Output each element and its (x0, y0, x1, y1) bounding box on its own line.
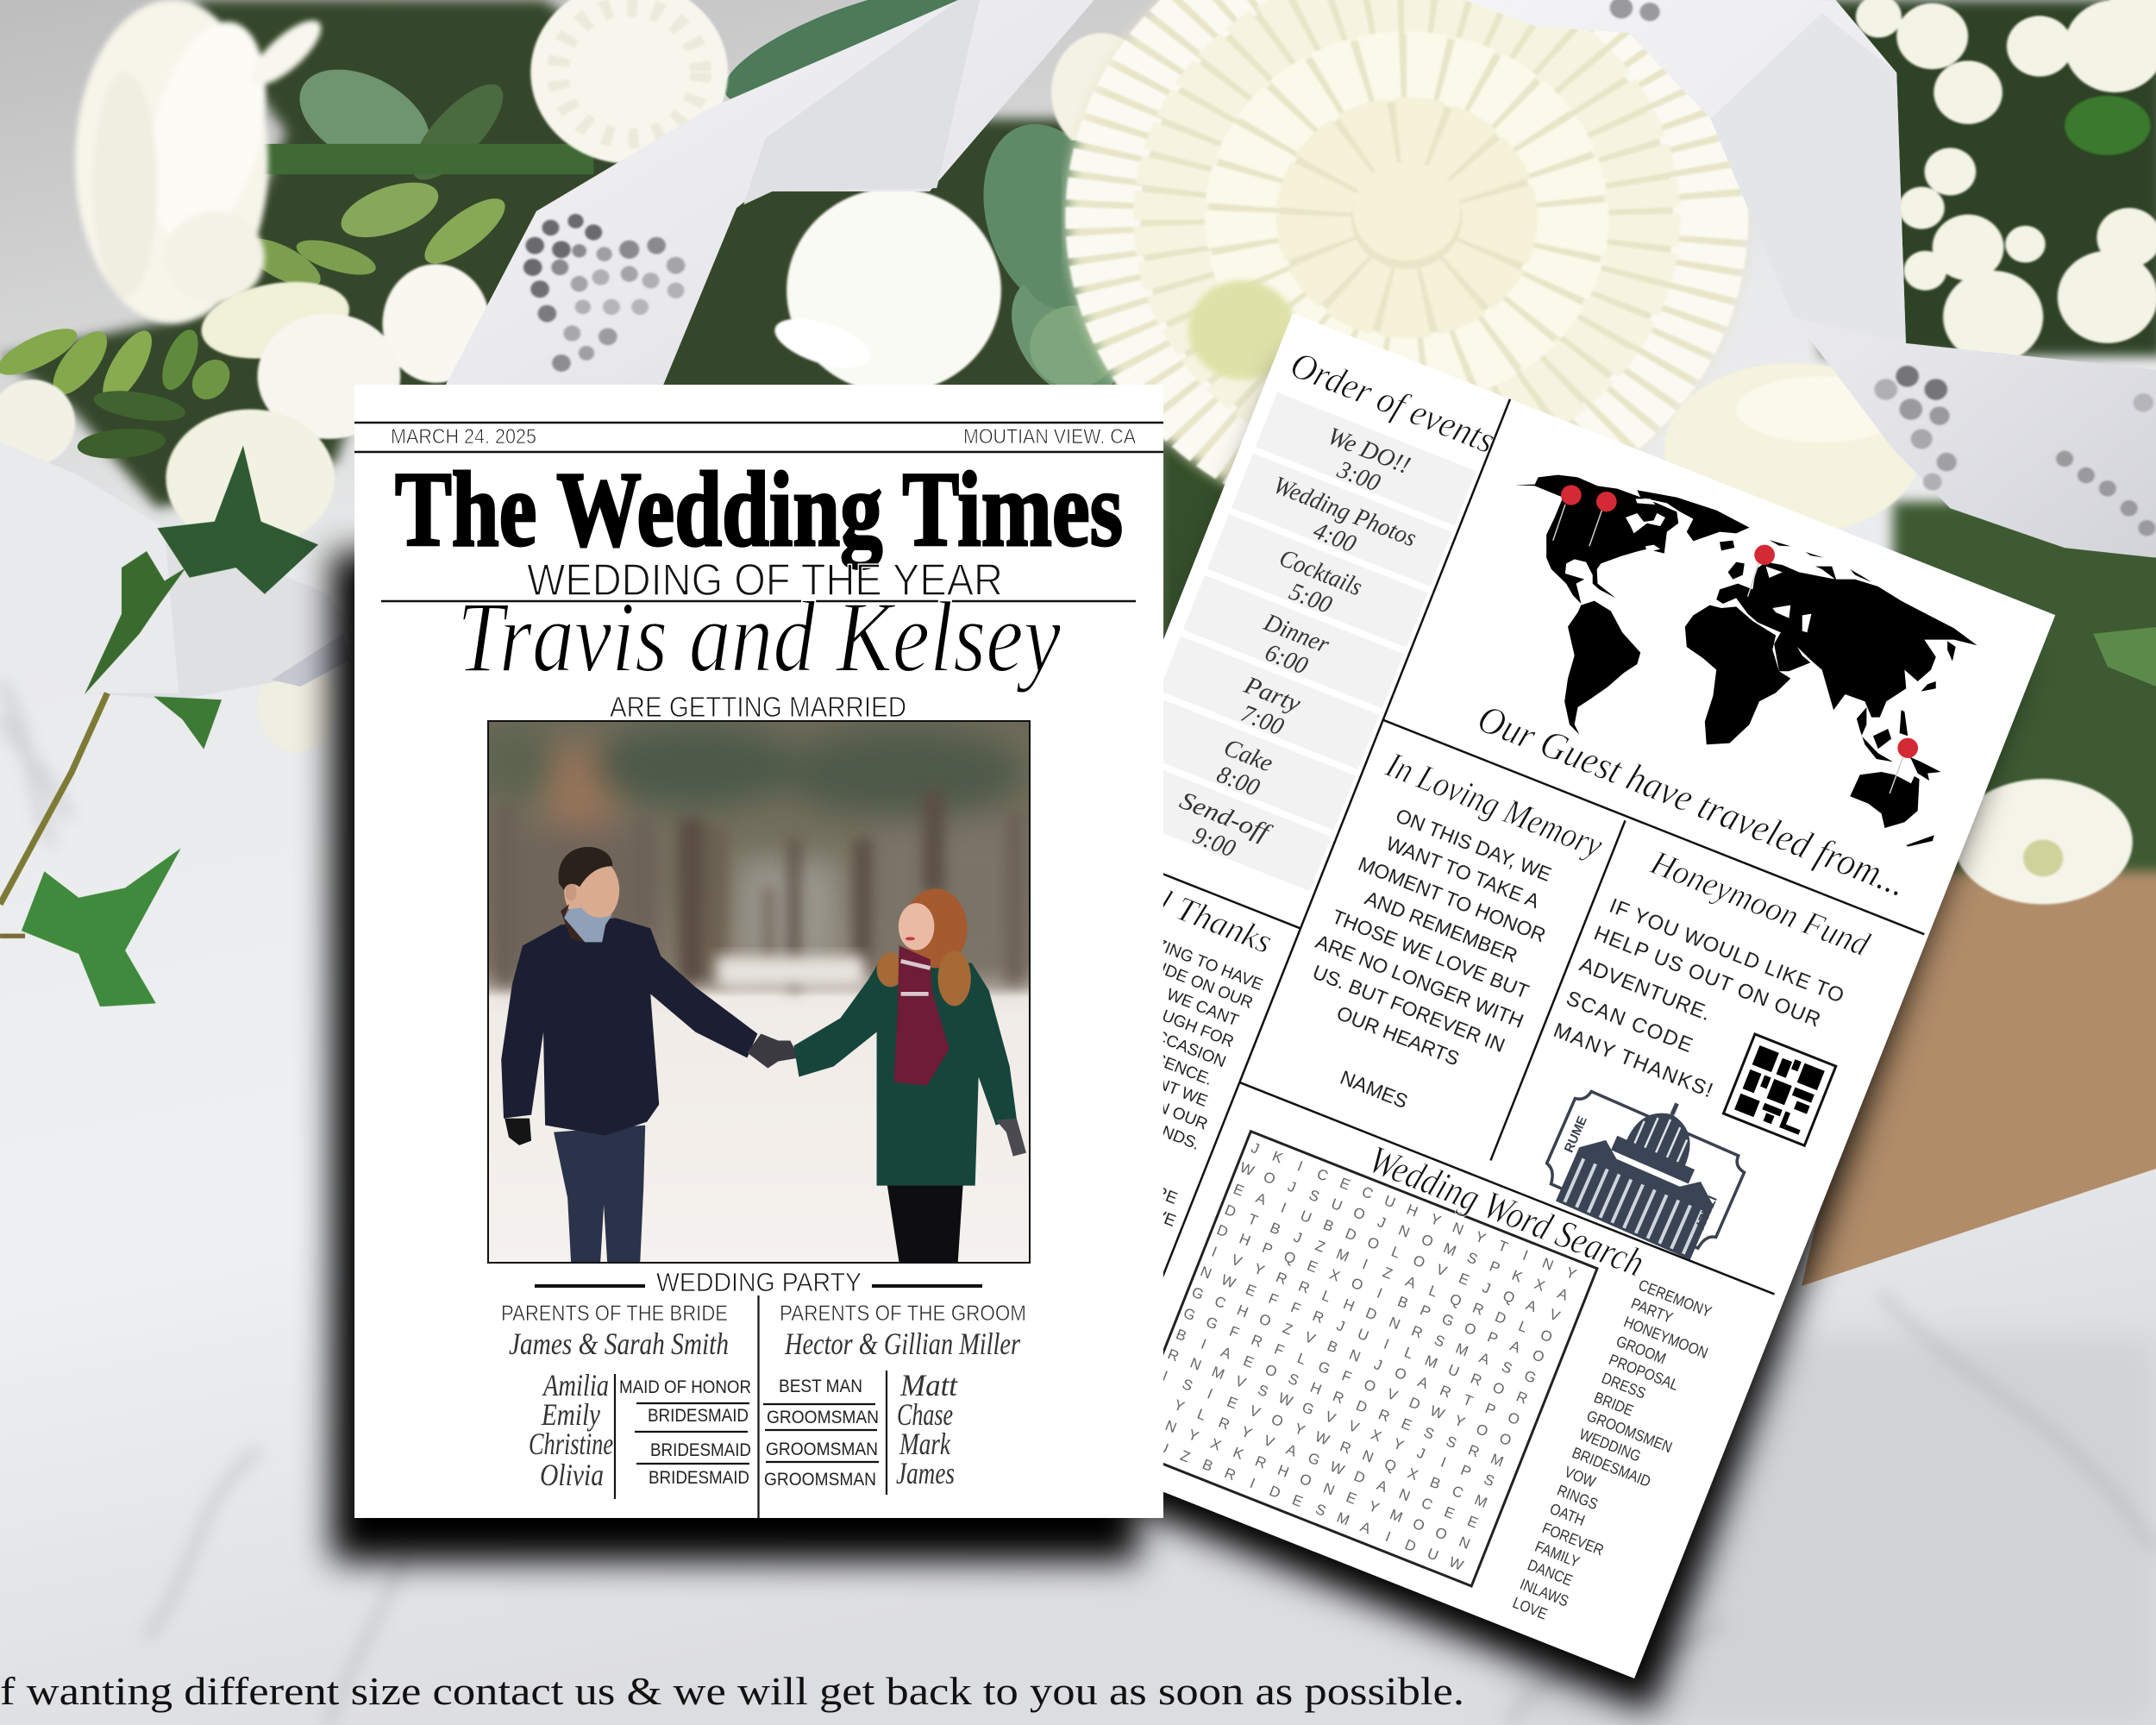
word search letters: RNMVSWGVVXYJIPS (1165, 1346, 1497, 1490)
honeymoon text (1551, 892, 1847, 1134)
white flower behind back card (1664, 363, 1921, 535)
schedule text: Send-off (1175, 787, 1276, 848)
bride's party names: Olivia (540, 1458, 604, 1492)
word search letters: EAIUBDOLOVEJQAV (1232, 1181, 1563, 1325)
memory text: NAMES (1338, 1066, 1411, 1113)
parents of the groom (780, 1302, 1026, 1361)
location line: MOUTIAN VIEW. CA (963, 425, 1136, 448)
word list: LOVE (1510, 1594, 1550, 1623)
heading: wedding party: WEDDING PARTY (656, 1267, 862, 1297)
bride's party names: Emily (541, 1397, 600, 1432)
word list: OATH (1547, 1500, 1588, 1529)
schedule text: Wedding Photos (1269, 471, 1420, 553)
word list: DRESS (1599, 1369, 1648, 1402)
word search letters: IVYRRLHDNRSMASG (1209, 1244, 1539, 1387)
forest (474, 724, 1030, 976)
wedding party dividers (615, 1295, 887, 1518)
schedule text: 3:00 (1333, 455, 1384, 498)
thanks text: BIG DAY AND WE CANT (1064, 946, 1241, 1031)
thanks text: YOU BY OUR SIDE ON OUR (1049, 917, 1256, 1013)
word list: PARTY (1628, 1295, 1676, 1327)
word search letters: ANYXKRHONEYMOON (1141, 1408, 1472, 1552)
back card: rotated program page (872, 313, 2055, 1678)
white ranunculus lower right (1954, 779, 2133, 904)
panel: word search (1122, 1092, 1739, 1643)
word list: VOW (1562, 1463, 1598, 1491)
date line: MARCH 24. 2025 (391, 425, 536, 448)
panel: honeymoon fund (1494, 831, 1889, 1284)
icon: Rome passport stamp: ITALY (1692, 1194, 1720, 1232)
dark foliage mass (0, 0, 1121, 508)
shadow of front card (332, 552, 1138, 1561)
word list: DANCE (1525, 1556, 1575, 1590)
dividers (934, 313, 2052, 1520)
word list: PROPOSAL (1607, 1351, 1681, 1394)
footer note: f wanting different size contact us & we will get back to you as soon as possible. (0, 1669, 1464, 1713)
thanks text: THANK YOU ENOUGH FOR (1033, 957, 1236, 1051)
schedule text: Party (1239, 671, 1305, 718)
word list: RINGS (1555, 1482, 1601, 1514)
memory text: AND REMEMBER (1362, 887, 1520, 967)
schedule text: Dinner (1259, 608, 1333, 659)
word search letters: BIAEOSHRDRESSRM (1174, 1326, 1506, 1471)
bride's party roles: BRIDESMAID (648, 1406, 749, 1426)
word search grid box (1125, 1132, 1597, 1586)
thanks text: SURROUNDS. (1093, 1096, 1202, 1154)
memory text: THOSE WE LOVE BUT (1329, 905, 1532, 1003)
thanks text: WILL LIVE IN OUR (1074, 1066, 1210, 1134)
honeymoon text: ADVENTURE. (1576, 953, 1714, 1026)
subheading: WEDDING OF THE YEAR (527, 555, 1003, 605)
continents (1515, 475, 1977, 847)
leaves (0, 0, 1142, 461)
word list: HONEYMOON (1621, 1313, 1710, 1362)
schedule text: Cake (1220, 734, 1276, 778)
memory text: ARE NO LONGER WITH (1313, 930, 1526, 1032)
groom's party roles: GROOMSMAN (766, 1440, 878, 1459)
bride's party roles: BRIDESMAID (649, 1468, 749, 1488)
are getting married: ARE GETTING MARRIED (610, 691, 906, 723)
parents of the bride (501, 1302, 729, 1361)
snow bank (716, 956, 865, 987)
honeymoon text: SCAN CODE (1563, 987, 1695, 1057)
word list: FOREVER (1539, 1519, 1606, 1559)
word list: CEREMONY (1636, 1276, 1714, 1320)
grey schedule bands (1111, 392, 1476, 891)
red map pins (1553, 485, 1918, 794)
heading: honeymoon fund: Honeymoon Fund (1645, 843, 1876, 964)
thanks text: EVERY MOMENT WE (1052, 1034, 1210, 1111)
word list (1510, 1276, 1727, 1643)
memory text (1269, 794, 1581, 1141)
word search letters: AUZBRIDESMAIDUW (1132, 1429, 1465, 1574)
bride's party roles (619, 1377, 751, 1488)
heading: special thanks: Special Thanks (1069, 848, 1278, 961)
groom's party roles: BEST MAN (779, 1377, 862, 1396)
tree trunks (495, 790, 1024, 990)
groom's party names (896, 1368, 958, 1490)
groom's party names: Chase (897, 1397, 953, 1432)
schedule text (1139, 411, 1445, 883)
panel: special thanks (963, 848, 1291, 1231)
heading: order of events: Order of events (1285, 343, 1501, 461)
white carnation top (530, 0, 728, 164)
thanks text: AND (1127, 1132, 1166, 1161)
groom's party names: Matt (899, 1368, 958, 1402)
heading: in loving memory: In Loving Memory (1380, 745, 1608, 866)
word list: FAMILY (1532, 1538, 1582, 1571)
bride's party names: Amilia (542, 1368, 609, 1402)
honeymoon text: HELP US OUT ON OUR (1590, 921, 1824, 1032)
word search letters: DYLRYVAGWDANCEE (1149, 1388, 1480, 1532)
schedule text: Cocktails (1275, 544, 1366, 601)
white bell flowers (1856, 0, 2156, 363)
thanks text: ALWAYS MORE (1062, 1147, 1180, 1208)
satin ribbon top (443, 0, 1094, 390)
satin ribbon left (0, 442, 350, 699)
word search letters: NWEFFRJUILMUROR (1198, 1263, 1530, 1408)
satin ribbon right (1464, 0, 2156, 558)
parents of the bride: PARENTS OF THE BRIDE (501, 1302, 728, 1326)
thanks text: IT WAS AMAZING TO HAVE (1065, 900, 1265, 994)
parents of the groom: PARENTS OF THE GROOM (780, 1302, 1026, 1326)
icon: QR code (1723, 1034, 1836, 1145)
word list: WEDDING (1576, 1426, 1643, 1465)
ribbon flower pattern (1610, 0, 2155, 536)
bride's party roles: MAID OF HONOR (619, 1377, 751, 1397)
white chrysanthemum (1067, 0, 1746, 531)
memory text: US. BUT FOREVER IN (1310, 960, 1508, 1057)
memory text: ON THIS DAY, WE (1393, 804, 1555, 886)
schedule text: 5:00 (1286, 578, 1336, 619)
heading: our guests have traveled from: Our Guest have traveled from... (1472, 696, 1913, 905)
background: kraft paper envelope (1802, 819, 2156, 1286)
word search letters (1131, 1138, 1581, 1574)
stamp labels: RUME (1562, 1114, 1590, 1155)
background: right floral bouquet (998, 0, 2156, 904)
honeymoon text: IF YOU WOULD LIKE TO (1606, 894, 1847, 1008)
photo: couple holding hands in snow (474, 721, 1030, 1263)
schedule text: 7:00 (1238, 699, 1288, 741)
schedule text: 6:00 (1262, 638, 1312, 681)
thanks text (963, 897, 1271, 1231)
groom's party names: James (896, 1456, 955, 1490)
fern foliage (1156, 0, 2156, 871)
memory text: OUR HEARTS (1333, 1001, 1463, 1070)
word list: BRIDESMAID (1570, 1444, 1653, 1490)
masthead rules (354, 423, 1163, 452)
word search letters: GCHOZVBNJOARTPO (1189, 1283, 1522, 1428)
word list: INLAWS (1518, 1575, 1571, 1610)
parents of the groom: Hector & Gillian Miller (784, 1327, 1021, 1361)
woman (793, 888, 1026, 1263)
memory text: MOMENT TO HONOR (1355, 852, 1549, 946)
eucalyptus leaves (998, 40, 1764, 387)
bride's party roles: BRIDESMAID (650, 1440, 751, 1460)
map sea cut-outs (1626, 499, 1811, 632)
word list: GROOM (1614, 1333, 1669, 1368)
couple names: Travis and Kelsey (457, 580, 1062, 693)
groom's party roles (764, 1377, 879, 1490)
word list: GROOMSMEN (1584, 1407, 1675, 1457)
schedule text: 9:00 (1189, 821, 1239, 863)
white ranunculus (75, 0, 331, 323)
parents of the bride: James & Sarah Smith (509, 1327, 729, 1361)
groom's party roles: GROOMSMAN (764, 1470, 876, 1490)
word list: BRIDE (1591, 1389, 1636, 1420)
honeymoon text: MANY THANKS! (1551, 1019, 1716, 1102)
schedule text: We DO!! (1324, 422, 1414, 480)
heading: wedding word search: Wedding Word Search (1363, 1137, 1651, 1285)
bride's party names (529, 1368, 613, 1492)
rule (381, 600, 1136, 602)
panel: order of events (1110, 342, 1501, 896)
title: The Wedding Times (395, 450, 1123, 569)
word search letters: WOJSUOJNOMSPKXA (1238, 1159, 1571, 1304)
ribbon heart pattern (523, 214, 685, 372)
word search letters: DTBJZMIZALQRDLO (1223, 1201, 1555, 1346)
front card: newspaper page (354, 385, 1163, 1518)
groom's party names: Mark (899, 1427, 951, 1461)
memory text: WANT TO TAKE A (1383, 831, 1543, 913)
shadow of back card (897, 362, 2018, 1712)
world map with pins (1515, 475, 1977, 847)
white flowers (0, 33, 1151, 752)
bride's party names: Christine (529, 1427, 613, 1461)
word search letters: GGFRFLGFOVDWYOO (1181, 1305, 1514, 1449)
basilica drawing (1556, 1075, 1745, 1260)
word search letters: ISIEVOYWRNQXBCM (1160, 1368, 1489, 1511)
schedule text: 8:00 (1213, 761, 1263, 802)
groom's party roles: GROOMSMAN (767, 1408, 879, 1427)
ivy leaves and vine (0, 446, 318, 1007)
panel: in loving memory (1269, 744, 1608, 1145)
word search letters: JKICECUHYNYTINY (1249, 1139, 1579, 1283)
thanks text: THIS OCCASION (1101, 1007, 1228, 1071)
word search letters: DHPQEXOIBPGOPAO (1214, 1221, 1546, 1366)
man (501, 847, 799, 1263)
thanks text: LOVE (1131, 1198, 1178, 1231)
thanks text: WITH YOUR PRESENCE. (1029, 1001, 1215, 1089)
schedule text: 4:00 (1310, 517, 1360, 558)
icon: Rome passport stamp (1534, 1065, 1758, 1265)
background: left floral bouquet (0, 0, 1151, 1007)
